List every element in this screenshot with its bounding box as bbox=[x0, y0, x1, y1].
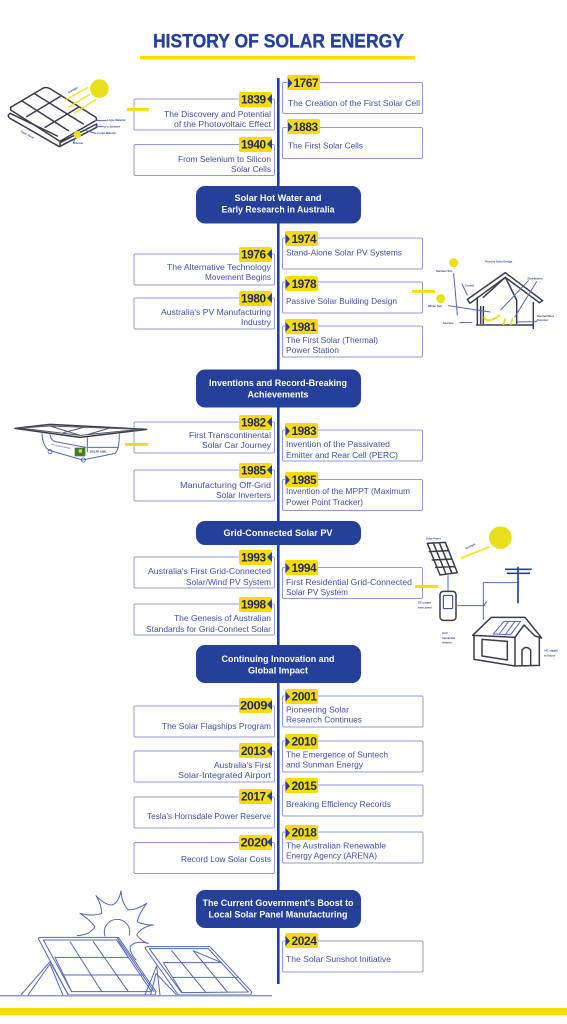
item 1998 bbox=[134, 597, 274, 635]
heading: Continuing Innovation: Global Impact bbox=[248, 666, 308, 676]
item 1993: Australia's First Grid-Connected bbox=[148, 566, 271, 576]
item 2018: Energy Agency (ARENA) bbox=[286, 850, 377, 860]
item 1981 bbox=[282, 319, 422, 357]
item 1993: Solar/Wind PV System bbox=[186, 577, 271, 587]
item 2018 bbox=[282, 825, 423, 863]
illustration: grid-connected house bbox=[418, 526, 558, 666]
title underline bbox=[140, 56, 415, 60]
heading: Inventions: Inventions and Record-Breaking bbox=[209, 378, 347, 388]
item 1981: Power Station bbox=[286, 345, 339, 355]
item 1839: of the Photovoltaic Effect bbox=[174, 119, 272, 129]
item 1985 left bbox=[134, 463, 274, 501]
item 1839: The Discovery and Potential bbox=[164, 109, 271, 119]
illustration: solar cell panel: p-n Junction bbox=[104, 124, 121, 128]
timeline spine bbox=[277, 78, 280, 984]
item 1985 left: Manufacturing Off-Grid bbox=[180, 480, 271, 490]
item 1985 right: Invention of the MPPT (Maximum bbox=[286, 486, 410, 496]
illustration: solar cell panel: Photon bbox=[74, 141, 84, 145]
item 2001: 2001 bbox=[292, 690, 317, 704]
illustration: grid-connected house: DC output bbox=[418, 600, 431, 604]
illustration: solar cell panel: Solar Panel bbox=[20, 129, 35, 140]
item 1985 left: Solar Inverters bbox=[216, 490, 271, 500]
illustration: grid-connected house: Grid bbox=[442, 631, 448, 635]
heading: Grid-Connected: Grid-Connected Solar PV bbox=[224, 528, 332, 538]
item 1993: 1993 bbox=[241, 550, 266, 564]
heading: Grid-Connected bbox=[196, 521, 361, 545]
item 1985 right: Power Point Tracker) bbox=[286, 497, 363, 507]
connector: cell panel bbox=[127, 108, 149, 111]
item 2020: 2020 bbox=[240, 836, 268, 850]
item 1839 bbox=[134, 92, 274, 130]
item 1940 bbox=[134, 137, 274, 176]
item 1883: 1883 bbox=[293, 120, 318, 134]
item 2020 bbox=[134, 835, 274, 874]
item 2010: 2010 bbox=[292, 734, 317, 748]
item 1980: Australia's PV Manufacturing bbox=[161, 307, 271, 317]
item 1974 bbox=[282, 231, 422, 269]
illustration: solar car: The Quiet Achiever bbox=[50, 443, 71, 450]
illustration: solar car bbox=[15, 424, 147, 462]
item 2024: The Solar Sunshot Initiative bbox=[286, 954, 391, 964]
item 1767: 1767 bbox=[294, 76, 319, 90]
connector: grid house bbox=[415, 585, 438, 588]
connector: solar car bbox=[125, 443, 148, 446]
illustration: passive solar house: Distribution bbox=[528, 276, 543, 280]
heading: Continuing Innovation: Continuing Innovation and bbox=[222, 654, 334, 664]
item 1983 bbox=[282, 423, 422, 461]
illustration: grid-connected house: inverter bbox=[442, 641, 452, 645]
item 1978: Passive Solar Building Design bbox=[286, 296, 397, 306]
item 2015: Breaking Efficiency Records bbox=[286, 799, 391, 809]
item 2009: 2009 bbox=[240, 698, 268, 712]
item 1978 bbox=[282, 276, 422, 313]
item 1994 bbox=[282, 560, 422, 598]
item 1981: 1981 bbox=[292, 320, 317, 334]
item 1767 bbox=[282, 75, 422, 114]
illustration: grid-connected house: interactive bbox=[442, 636, 456, 640]
item 2009: The Solar Flagships Program bbox=[162, 721, 271, 731]
heading: Inventions: Achievements bbox=[248, 390, 308, 400]
item 2013: 2013 bbox=[241, 744, 266, 758]
illustration: solar cell panel: p-type Material bbox=[97, 131, 116, 135]
item 1982: 1982 bbox=[241, 416, 266, 430]
illustration: passive solar house: Winter Sun bbox=[428, 304, 442, 308]
item 1767: The Creation of the First Solar Cell bbox=[288, 98, 420, 108]
item 2015 bbox=[282, 778, 423, 816]
item 1976: 1976 bbox=[241, 248, 266, 262]
item 1982 bbox=[134, 415, 274, 453]
heading: Solar Hot Water: Early Research in Australia bbox=[222, 204, 335, 214]
item 1940: 1940 bbox=[241, 138, 266, 152]
item 2001: Pioneering Solar bbox=[286, 704, 349, 714]
item 2001 bbox=[282, 689, 423, 727]
item 1976: The Alternative Technology bbox=[167, 262, 272, 272]
item 2017: 2017 bbox=[241, 790, 266, 804]
item 2017: Tesla's Hornsdale Power Reserve bbox=[147, 811, 271, 821]
item 2010: The Emergence of Suntech bbox=[286, 750, 388, 760]
bottom yellow bar bbox=[0, 1008, 567, 1015]
item 2017 bbox=[134, 789, 274, 828]
heading: Current Government: The Current Government's Boost to bbox=[202, 898, 354, 908]
item 2010: and Sunman Energy bbox=[286, 760, 364, 770]
illustration: solar panels and sun bbox=[20, 891, 252, 996]
item 1940: Solar Cells bbox=[231, 164, 271, 174]
item 1980 bbox=[134, 291, 274, 329]
illustration: passive solar house: Summer Sun bbox=[436, 269, 453, 273]
heading: Current Government bbox=[196, 890, 361, 928]
item 2020: Record Low Solar Costs bbox=[181, 854, 271, 864]
item 1983: Emitter and Rear Cell (PERC) bbox=[286, 450, 398, 460]
item 1985 right: 1985 bbox=[292, 473, 317, 487]
item 1998: The Genesis of Australian bbox=[174, 613, 271, 623]
illustration: passive solar house: Passive Solar Design bbox=[485, 259, 513, 263]
illustration: solar car: SOLAR 1985 bbox=[90, 449, 106, 453]
item 1998: 1998 bbox=[241, 598, 266, 612]
item 2015: 2015 bbox=[292, 779, 317, 793]
item 1940: From Selenium to Silicon bbox=[178, 154, 271, 164]
item 1982: First Transcontinental bbox=[189, 430, 271, 440]
item 1976: Movement Begins bbox=[205, 272, 271, 282]
illustration: passive solar house: Absorber bbox=[536, 318, 548, 322]
item 1998: Standards for Grid-Connect Solar bbox=[146, 624, 271, 634]
item 2009 bbox=[134, 698, 274, 737]
item 1839: 1839 bbox=[241, 92, 266, 106]
item 2013: Australia's First bbox=[214, 760, 272, 770]
illustration: passive solar house: Thermal Mass bbox=[536, 314, 555, 318]
heading: Inventions bbox=[196, 370, 361, 408]
item 1980: 1980 bbox=[241, 292, 266, 306]
item 2013: Solar-Integrated Airport bbox=[178, 770, 272, 780]
item 1883 bbox=[282, 119, 422, 158]
item 2024: 2024 bbox=[292, 934, 317, 948]
item 1985 right bbox=[282, 472, 422, 510]
item 1883: The First Solar Cells bbox=[288, 140, 363, 150]
item 2018: The Australian Renewable bbox=[286, 840, 386, 850]
item 1976 bbox=[134, 247, 274, 285]
item 1978: 1978 bbox=[292, 277, 317, 291]
item 1994: Solar PV System bbox=[286, 587, 348, 597]
illustration: grid-connected house: Solar Panel bbox=[426, 537, 441, 541]
connector: passive house bbox=[412, 290, 435, 293]
item 1974: 1974 bbox=[292, 232, 317, 246]
illustration: solar cell panel: Sunlight bbox=[67, 86, 79, 94]
illustration: passive solar house bbox=[428, 258, 555, 328]
item 1994: First Residential Grid-Connected bbox=[286, 577, 412, 587]
title: HISTORY OF SOLAR ENERGY bbox=[153, 30, 404, 52]
item 1993 bbox=[134, 550, 274, 588]
illustration: grid-connected house: to house bbox=[544, 654, 556, 658]
item 1985 left: 1985 bbox=[241, 464, 266, 478]
heading: Solar Hot Water: Solar Hot Water and bbox=[234, 193, 322, 203]
item 1983: Invention of the Passivated bbox=[286, 439, 390, 449]
item 1981: The First Solar (Thermal) bbox=[286, 335, 378, 345]
item 2018: 2018 bbox=[292, 826, 317, 840]
illustration: grid-connected house: Sunlight bbox=[465, 542, 476, 550]
ground line bbox=[0, 995, 272, 996]
illustration: passive solar house: Aperture bbox=[443, 321, 454, 325]
item 2010 bbox=[282, 734, 423, 772]
item 2024 bbox=[282, 933, 423, 972]
item 2013 bbox=[134, 743, 274, 782]
heading: Solar Hot Water bbox=[196, 186, 361, 224]
item 1974: Stand-Alone Solar PV Systems bbox=[286, 248, 402, 258]
item 1982: Solar Car Journey bbox=[202, 440, 272, 450]
illustration: grid-connected house: from panel bbox=[418, 605, 432, 609]
illustration: solar cell panel: n-type Material bbox=[107, 118, 126, 122]
item 1983: 1983 bbox=[292, 424, 317, 438]
heading: Continuing Innovation bbox=[196, 645, 361, 683]
item 1980: Industry bbox=[241, 317, 272, 327]
heading: Current Government: Local Solar Panel Manufacturing bbox=[208, 910, 348, 920]
item 1994: 1994 bbox=[292, 561, 317, 575]
illustration: passive solar house: Control bbox=[465, 284, 474, 288]
illustration: grid-connected house: A/C supply bbox=[544, 649, 558, 653]
illustration: solar cell panel bbox=[8, 79, 126, 147]
item 2001: Research Continues bbox=[286, 714, 362, 724]
